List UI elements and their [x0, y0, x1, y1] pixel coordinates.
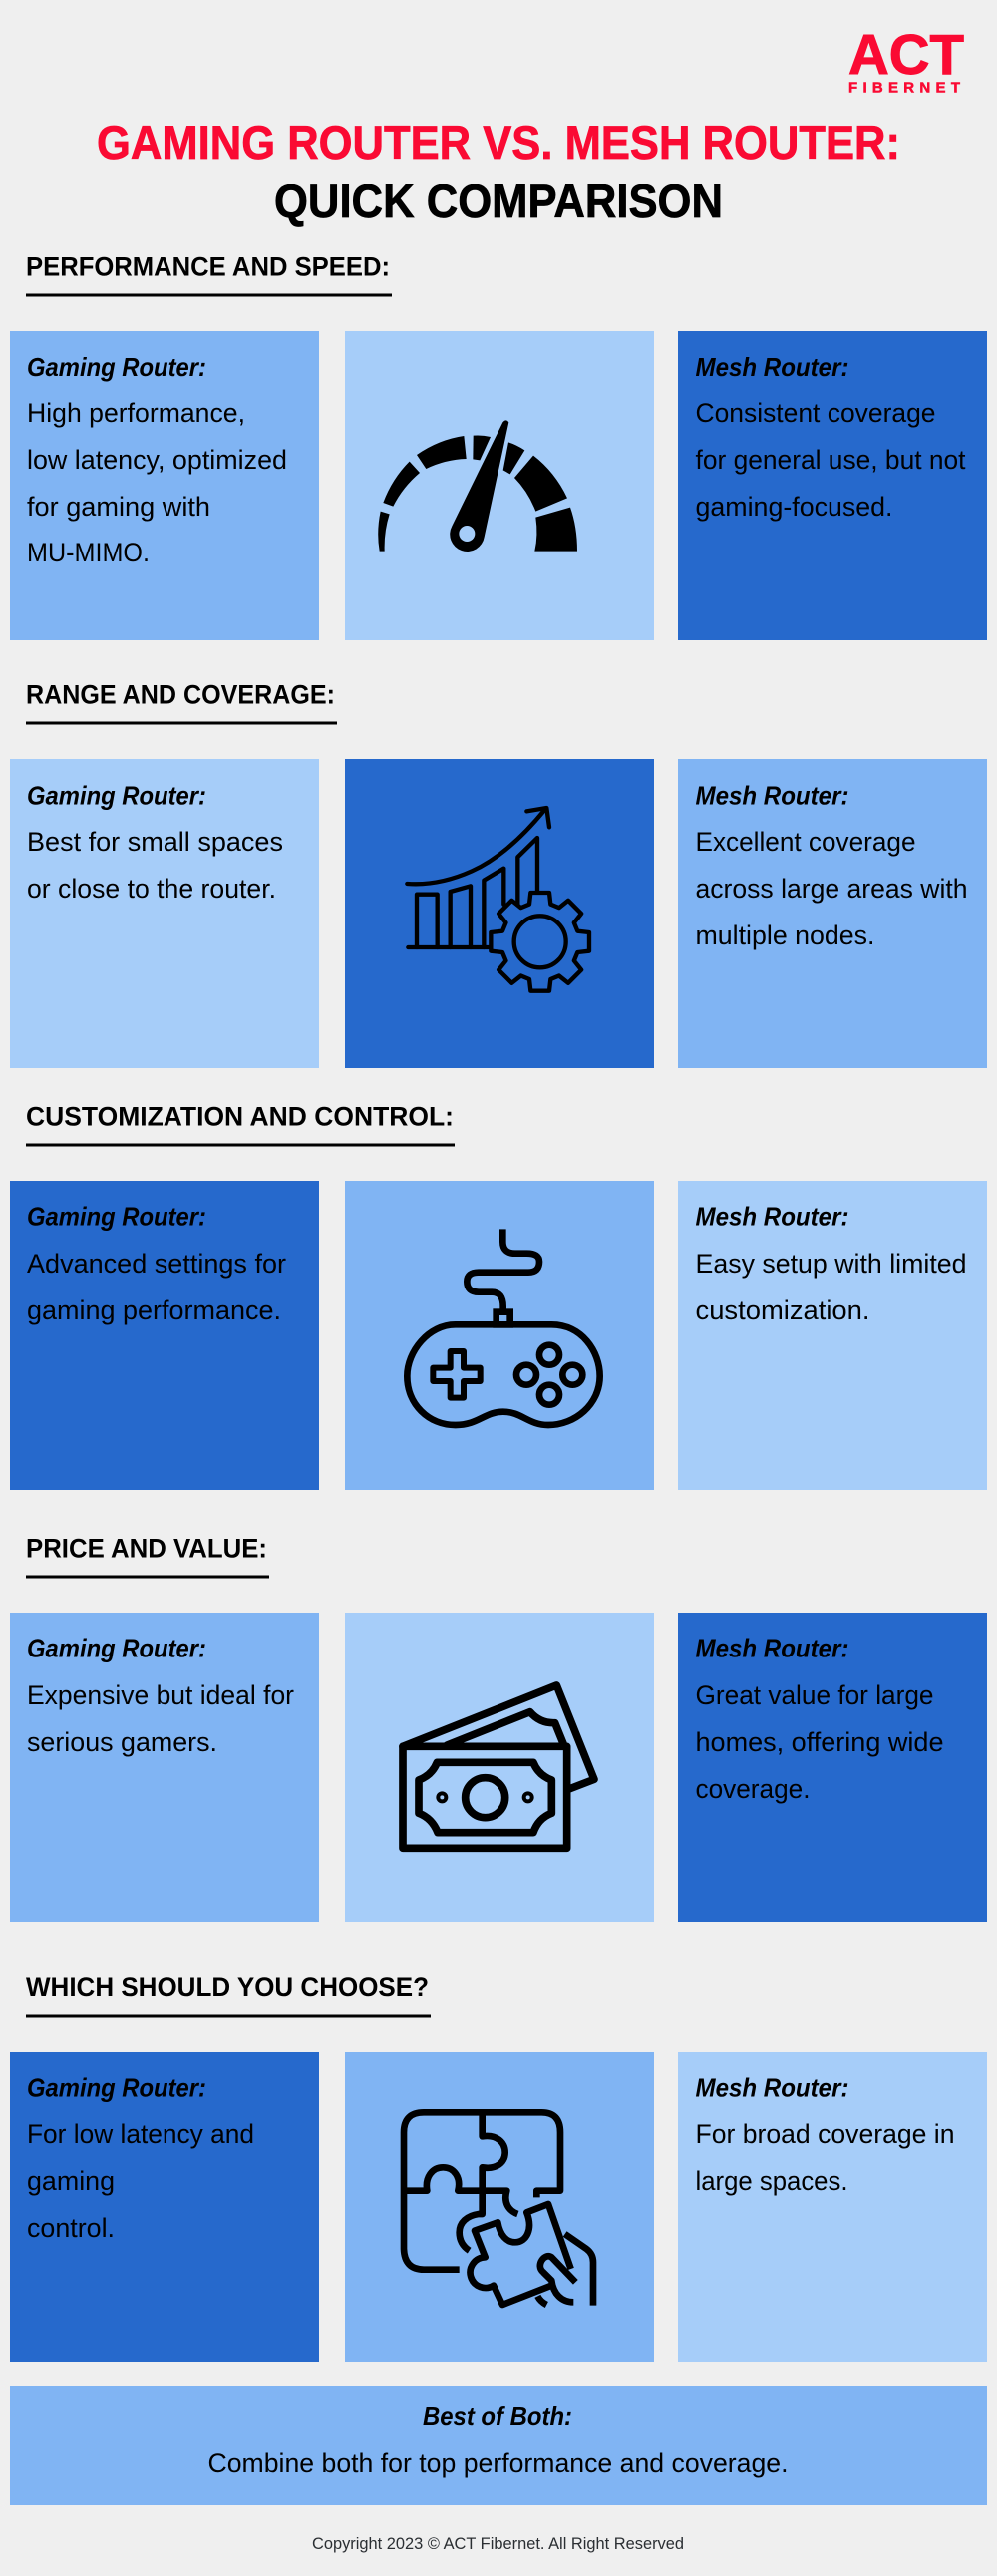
- panel: performance, gaming router: [10, 331, 319, 640]
- panel: choose icon: [345, 2052, 654, 2362]
- panel: range icon: [345, 759, 654, 1068]
- heading: which should you choose: [26, 1972, 431, 2017]
- panel: choose, gaming router: [10, 2052, 319, 2362]
- panel: range, mesh router: multiple nodes.: [696, 920, 875, 950]
- panel: price, mesh router: coverage.: [696, 1774, 810, 1804]
- logo: ACT Fibernet: FIBERNET: [848, 80, 960, 96]
- icon: speedometer: [378, 420, 577, 552]
- icon: game controller: [407, 1229, 600, 1425]
- panel: performance, mesh router: [678, 331, 987, 640]
- panel: performance, gaming router: High performance,: [27, 398, 245, 428]
- panel: price, mesh router: Great value for large: [696, 1680, 933, 1710]
- panel: range, gaming router: Best for small spaces: [27, 827, 283, 857]
- panel: price, mesh router: homes, offering wide: [696, 1727, 943, 1757]
- heading: range and coverage: [26, 680, 337, 724]
- heading: price and value: PRICE AND VALUE:: [26, 1534, 267, 1564]
- icon: growth chart with gear: [407, 808, 589, 991]
- panel: range, mesh router: across large areas with: [696, 874, 967, 904]
- panel: range, gaming router: Gaming Router:: [27, 780, 206, 810]
- panel: price icon: [345, 1613, 654, 1922]
- panel: customization, mesh router: [678, 1181, 987, 1490]
- logo: ACT Fibernet: ACT: [848, 23, 964, 87]
- panel: performance, mesh router: for general use, but not: [696, 445, 966, 475]
- panel: customization, gaming router: Gaming Router:: [27, 1201, 206, 1231]
- panel: range, gaming router: [10, 759, 319, 1068]
- heading: range and coverage: RANGE AND COVERAGE:: [26, 680, 335, 710]
- panel: range, gaming router: or close to the router.: [27, 874, 276, 904]
- panel: price, gaming router: Expensive but ideal for: [27, 1680, 294, 1710]
- panel: range, mesh router: Excellent coverage: [696, 827, 915, 857]
- panel: performance, mesh router: Consistent coverage: [696, 398, 935, 428]
- panel: customization, mesh router: Easy setup with limited: [696, 1249, 967, 1279]
- panel: best of both: Combine both for top performance and coverage.: [207, 2448, 788, 2478]
- panel: choose, mesh router: large spaces.: [696, 2166, 847, 2196]
- panel: customization, gaming router: [10, 1181, 319, 1490]
- panel: customization, mesh router: Mesh Router:: [696, 1201, 849, 1231]
- panel: performance, mesh router: Mesh Router:: [696, 352, 849, 382]
- panel: performance, mesh router: gaming-focused.: [696, 492, 893, 522]
- heading: customization and control: CUSTOMIZATION AND CONTROL:: [26, 1101, 454, 1131]
- panel: price, mesh router: Mesh Router:: [696, 1634, 849, 1663]
- panel: customization, gaming router: gaming performance.: [27, 1295, 281, 1325]
- panel: customization, mesh router: customization.: [696, 1295, 869, 1325]
- panel: price, mesh router: [678, 1613, 987, 1922]
- panel: performance icon: [345, 331, 654, 640]
- title: QUICK COMPARISON: [274, 175, 723, 227]
- title: GAMING ROUTER VS. MESH ROUTER:: [97, 116, 900, 169]
- panel: price, gaming router: Gaming Router:: [27, 1634, 206, 1663]
- panel: customization, gaming router: Advanced settings for: [27, 1249, 286, 1279]
- panel: choose, mesh router: For broad coverage in: [696, 2119, 955, 2149]
- icon: banknotes: [403, 1685, 594, 1848]
- footer copyright: Copyright 2023 © ACT Fibernet. All Right Reserved: [312, 2534, 684, 2553]
- panel: range, mesh router: [678, 759, 987, 1068]
- heading: customization and control: [26, 1101, 455, 1147]
- panel: performance, gaming router: low latency, optimized: [27, 445, 287, 475]
- panel: range, mesh router: Mesh Router:: [696, 780, 849, 810]
- panel: choose, gaming router: Gaming Router:: [27, 2072, 206, 2102]
- heading: performance and speed: PERFORMANCE AND SPEED:: [26, 251, 390, 281]
- heading: price and value: [26, 1534, 269, 1578]
- panel: customization icon: [345, 1181, 654, 1490]
- title: [97, 116, 900, 227]
- heading: performance and speed: [26, 251, 392, 297]
- panel: choose, mesh router: [678, 2052, 987, 2362]
- icon: puzzle with hand: [404, 2112, 593, 2306]
- panel: choose, gaming router: For low latency and: [27, 2119, 254, 2149]
- heading: which should you choose: WHICH SHOULD YOU CHOOSE?: [26, 1972, 429, 2002]
- panel: choose, gaming router: control.: [27, 2213, 115, 2243]
- panel: performance, gaming router: Gaming Router:: [27, 352, 206, 382]
- panel: performance, gaming router: MU-MIMO.: [27, 538, 150, 567]
- panel: choose, mesh router: Mesh Router:: [696, 2072, 849, 2102]
- panel: performance, gaming router: for gaming with: [27, 492, 210, 522]
- panel: choose, gaming router: gaming: [27, 2166, 115, 2196]
- panel: best of both: [10, 2386, 987, 2505]
- panel: price, gaming router: [10, 1613, 319, 1922]
- panel: price, gaming router: serious gamers.: [27, 1727, 217, 1757]
- panel: best of both: Best of Both:: [423, 2401, 572, 2431]
